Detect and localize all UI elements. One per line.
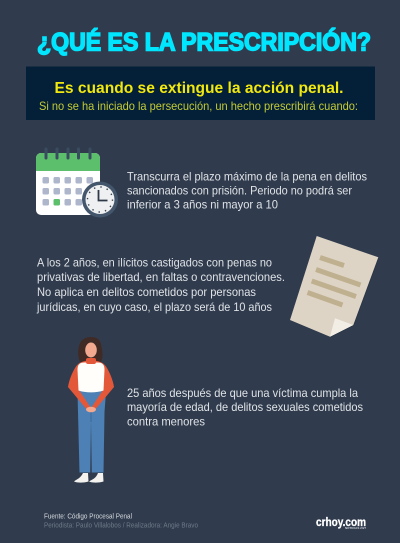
- text block: second condition: A los 2 años, en ilícitos castigados con penas no: [37, 256, 272, 270]
- text block: first condition: Transcurra el plazo máximo de la pena en delitos: [127, 170, 367, 184]
- face: [85, 342, 97, 358]
- text block: second condition: privativas de libertad, en faltas o contravenciones.: [37, 270, 285, 284]
- shirt: [78, 362, 104, 392]
- sleeves: [68, 360, 114, 411]
- definition subheading: Si no se ha iniciado la persecución, un hecho prescribirá cuando:: [39, 99, 358, 113]
- text block: third condition: 25 años después de que una víctima cumpla la: [127, 386, 358, 400]
- footer credits: Periodista: Paulo Villalobos / Realizadora: Angie Bravo: [44, 522, 198, 530]
- inner arm gap: [79, 389, 103, 408]
- hands: [86, 407, 96, 412]
- definition heading: Es cuando se extingue la acción penal.: [54, 80, 344, 97]
- text block: second condition: jurídicas, en cuyo caso, el plazo será de 10 años: [36, 300, 272, 314]
- pants: [78, 392, 106, 472]
- panel: definition: [26, 66, 375, 120]
- icon: document: [290, 236, 379, 338]
- text block: second condition: [36, 256, 285, 314]
- illustration: woman standing: [68, 337, 114, 483]
- icon: calendar with clock: [36, 149, 118, 218]
- text block: second condition: No aplica en delitos cometidos por personas: [37, 285, 256, 299]
- logo: crhoy.com: crhoy.com: [316, 515, 366, 529]
- text block: first condition: [127, 170, 367, 212]
- text block: third condition: [127, 386, 363, 428]
- icon: clock: [82, 182, 118, 218]
- title: ¿QUÉ ES LA PRESCRIPCIÓN?: [37, 26, 371, 56]
- footer credits: [44, 514, 198, 530]
- footer credits: Fuente: Código Procesal Penal: [44, 514, 132, 520]
- hair: [78, 337, 103, 362]
- turtleneck: [86, 358, 96, 364]
- text block: first condition: sancionados con prisión. Periodo no podrá ser: [127, 184, 352, 198]
- shoes: [74, 473, 88, 483]
- text block: third condition: mayoría de edad, de delitos sexuales cometidos: [127, 400, 363, 414]
- text block: first condition: inferior a 3 años ni mayor a 10: [127, 198, 278, 212]
- logo: crhoy.com: NOTICIAS 24/7: [345, 526, 366, 530]
- text block: third condition: contra menores: [127, 414, 205, 428]
